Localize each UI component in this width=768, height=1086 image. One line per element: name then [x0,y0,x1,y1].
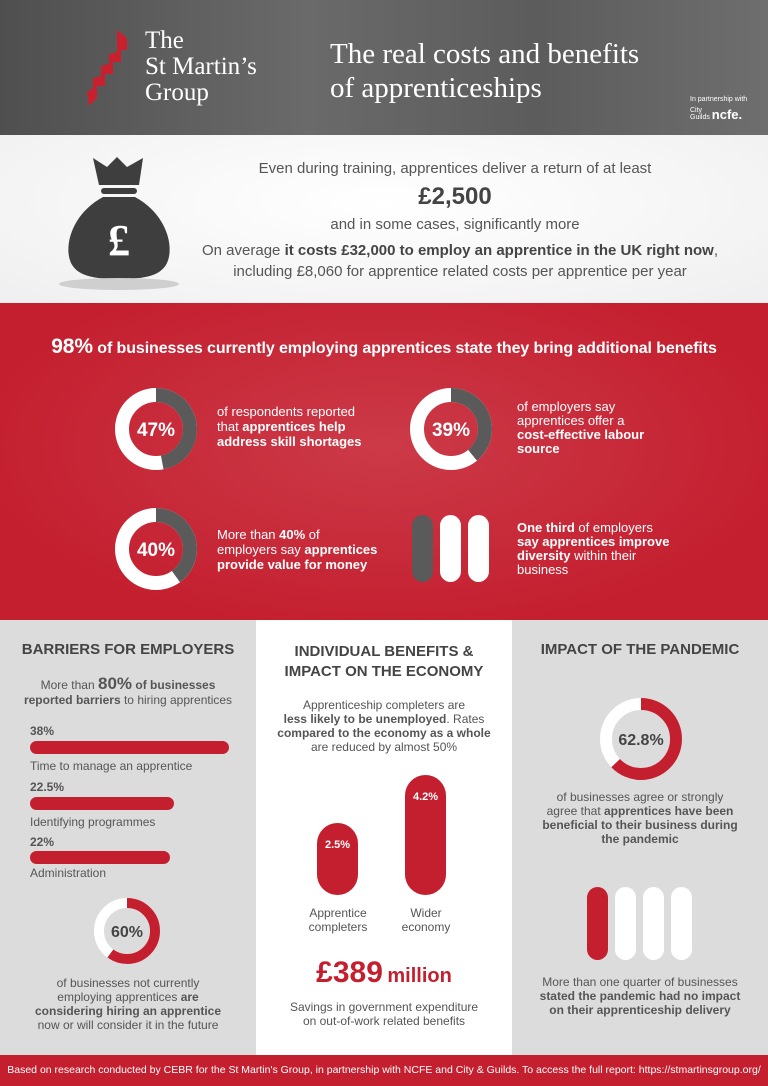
return text: and in some cases, significantly more [330,216,580,233]
text 60%: of businesses not currently [57,976,199,990]
partner logos: ncfe. [712,107,742,122]
pill chart: 4.2% [413,791,438,803]
text 39%: source [517,441,560,456]
text 47% [217,404,362,449]
logo: The [145,27,184,54]
title: of apprenticeships [330,72,542,104]
text 39%: apprentices offer a [517,413,624,428]
cost text: On average it costs £32,000 to employ an apprentice in the UK right now, [202,242,718,259]
panel: benefits [0,303,768,620]
intro text [277,698,491,754]
text 39%: of employers say [517,399,615,414]
bar chart: Administration [30,866,106,880]
donut 40% [115,508,197,590]
donut 47%: 47% [137,420,175,441]
text 60% [35,976,221,1032]
text quarter: on their apprenticeship delivery [549,1003,731,1017]
text 39%: cost-effective labour [517,427,644,442]
text 60%: now or will consider it in the future [38,1018,218,1032]
intro text: Apprenticeship completers are [303,698,465,712]
text 62.8% [542,790,738,846]
bar chart: 22.5% [30,780,64,794]
cost text [202,242,718,280]
partner logos: In partnership with [690,96,747,103]
donut 39% [410,388,492,470]
partner logos: Guilds [690,114,710,121]
cost panel [0,135,768,303]
pill chart: completers [309,920,367,934]
pill chart: Wider [410,906,442,920]
title: The real costs and benefits [330,38,639,70]
bar chart: 38% [30,724,54,738]
text 47%: address skill shortages [217,434,362,449]
savings text: on out-of-work related benefits [303,1014,465,1028]
return text: £2,500 [418,183,492,210]
heading: IMPACT ON THE ECONOMY [285,663,483,680]
intro text: are reduced by almost 50% [311,740,457,754]
heading: IMPACT OF THE PANDEMIC [541,641,739,658]
text 62.8%: agree that apprentices have been [547,804,733,818]
donut 62.8%: 62.8% [618,732,664,749]
text 39% [517,399,644,456]
partner logos: City [690,107,702,114]
text 62.8%: of businesses agree or strongly [557,790,723,804]
donut 62.8% [600,698,682,780]
donut 60% [94,898,160,964]
panel: individual benefits [256,620,512,1055]
heading: 98% of businesses currently employing apprentices state they bring additional benefits [51,335,717,358]
icon: money bag [59,157,179,290]
bar chart: 22% [30,835,54,849]
text 40%: employers say apprentices [217,542,377,557]
header banner [0,0,768,135]
text 62.8%: the pandemic [601,832,679,846]
logo [87,27,257,106]
text 40% [217,527,377,572]
bar chart: Time to manage an apprentice [30,759,192,773]
heading [285,643,484,680]
return text: Even during training, apprentices deliver a return of at least [259,160,651,177]
text one third [517,520,669,577]
text quarter: More than one quarter of businesses [542,975,738,989]
cost text: including £8,060 for apprentice related costs per apprentice per year [233,263,687,280]
icon: money bag: £ [108,216,130,265]
panel: barriers [0,620,256,1055]
bar chart [30,724,229,880]
text one third: business [517,562,568,577]
footer: Based on research conducted by CEBR for the St Martin's Group, in partnership with NCFE and City & Guilds. To access the full report: https://stmartinsgroup.org/ [7,1064,761,1076]
pill chart: Apprentice [309,906,367,920]
intro text: reported barriers to hiring apprentices [24,693,232,707]
text 40%: More than 40% of [217,527,320,542]
icon: quarter pills [587,887,692,960]
footer [0,1055,768,1086]
intro text: compared to the economy as a whole [277,726,491,740]
heading: BARRIERS FOR EMPLOYERS [22,641,234,658]
intro text: More than 80% of businesses [41,674,215,693]
pill chart: 2.5% [325,839,350,851]
logo: St Martin’s [145,53,257,80]
text one third: diversity within their [517,548,636,563]
text quarter [540,975,740,1017]
text one third: say apprentices improve [517,534,669,549]
donut 47% [115,388,197,470]
text 47%: that apprentices help [217,419,346,434]
text 40%: provide value for money [217,557,367,572]
pill chart [309,775,450,934]
text 47%: of respondents reported [217,404,355,419]
text 60%: employing apprentices are [57,990,199,1004]
icon: one third pills [412,515,489,582]
pill chart: economy [402,920,450,934]
logo: Group [145,79,209,106]
heading: INDIVIDUAL BENEFITS & [295,643,473,660]
return text [259,160,652,233]
text quarter: stated the pandemic had no impact [540,989,740,1003]
savings text [290,1000,478,1028]
savings stat: £389 million [316,956,452,989]
title [330,38,639,104]
intro text [24,674,232,707]
bar chart: Identifying programmes [30,815,155,829]
donut 40%: 40% [137,540,175,561]
donut 60%: 60% [111,924,143,941]
donut 39%: 39% [432,420,470,441]
text one third: One third of employers [517,520,653,535]
text 62.8%: beneficial to their business during [542,818,738,832]
partner logos [690,96,747,122]
intro text: less likely to be unemployed. Rates [284,712,484,726]
text 60%: considering hiring an apprentice [35,1004,221,1018]
panel: pandemic [512,620,768,1055]
savings text: Savings in government expenditure [290,1000,478,1014]
